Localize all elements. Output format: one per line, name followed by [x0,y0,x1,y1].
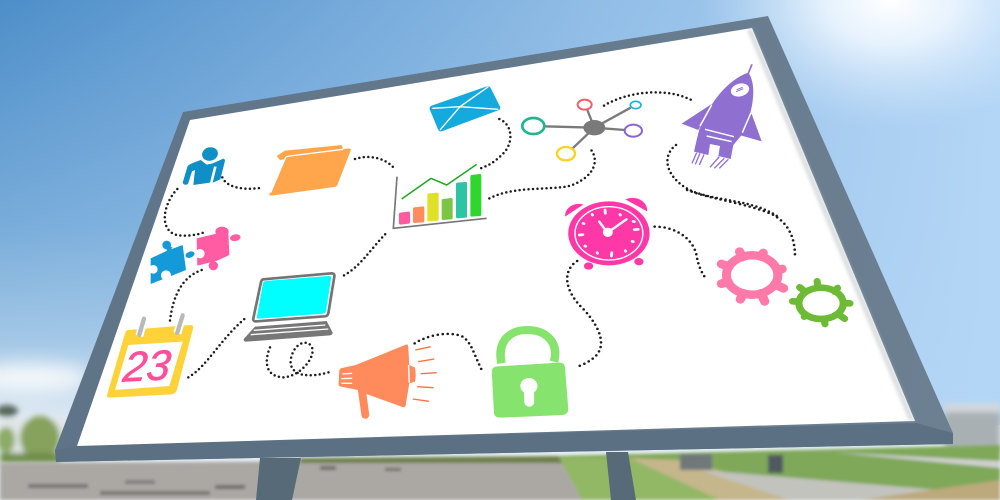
top centre group: envelope, chart, network, rocket [393,64,780,228]
icon: calendar: 23 [120,341,174,391]
icon: folder [269,145,351,196]
connector lines: top [481,92,780,218]
left group: person, folder, puzzle, calendar, laptop [107,145,393,398]
icon: green gear [792,281,850,324]
icon: megaphone [339,344,437,419]
icon: rocket [682,64,762,168]
icon: envelope [430,86,500,131]
connector lines: left [165,157,393,377]
icon: laptop [244,273,334,342]
icon: padlock [492,330,568,418]
icon: alarm clock [565,198,650,270]
bar chart icon [393,164,487,228]
billboard panel [77,28,915,446]
icon: puzzle pieces [149,227,241,284]
icon: network hub [522,100,642,160]
panel edge shadow [747,28,915,421]
frame shading [55,423,953,462]
connector lines: lower right [415,190,795,369]
lower right group: clock, gears, lock, megaphone [339,190,850,419]
icon: person [183,145,225,185]
icon: calendar [107,315,193,398]
billboard posts [256,452,636,500]
icon: pink gear [721,252,784,301]
